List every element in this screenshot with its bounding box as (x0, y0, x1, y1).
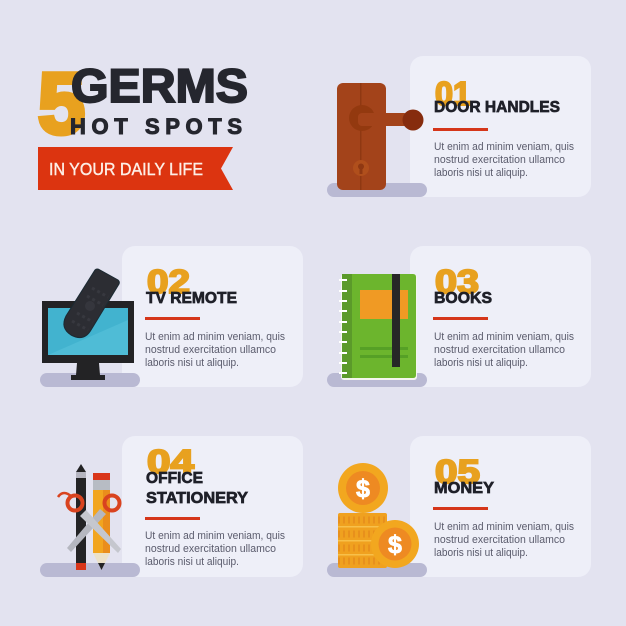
panel: office stationery (40, 436, 303, 577)
icon: coins (327, 463, 427, 577)
body text (145, 530, 285, 568)
body text: nostrud exercitation ullamco (434, 154, 565, 166)
heading: office stationery: STATIONERY (146, 490, 248, 507)
body text: Ut enim ad minim veniam, quis (145, 331, 285, 343)
body text (145, 331, 285, 369)
body text (434, 521, 574, 559)
body text: laboris nisi ut aliquip. (145, 357, 239, 369)
big number 5: 5 (38, 56, 85, 152)
accent line (145, 317, 200, 320)
body text: laboris nisi ut aliquip. (434, 547, 528, 559)
number 05: 05 (435, 453, 480, 490)
icon: door handle (327, 83, 427, 197)
heading: office stationery: OFFICE (146, 470, 203, 487)
icon: coins: $ (388, 531, 402, 559)
icon: book (327, 274, 427, 387)
number 04: 04 (147, 443, 195, 480)
icon: coins: $ (356, 475, 370, 503)
number 03: 03 (435, 263, 479, 300)
panel: door handles (327, 56, 591, 197)
heading: books: BOOKS (434, 290, 492, 307)
heading: door handles: DOOR HANDLES (434, 99, 560, 116)
body text: nostrud exercitation ullamco (434, 534, 565, 546)
body text: laboris nisi ut aliquip. (434, 167, 528, 179)
body text: nostrud exercitation ullamco (145, 543, 276, 555)
body text (434, 331, 574, 369)
heading: GERMS: GERMS (71, 59, 248, 112)
accent line (433, 317, 488, 320)
heading: office stationery (146, 470, 248, 507)
body text: laboris nisi ut aliquip. (145, 556, 239, 568)
title block (38, 56, 248, 190)
number 02: 02 (147, 263, 190, 300)
ribbon banner (38, 147, 233, 190)
accent line (433, 507, 488, 510)
heading: HOT SPOTS: HOT SPOTS (70, 114, 242, 139)
accent line (433, 128, 488, 131)
body text: nostrud exercitation ullamco (434, 344, 565, 356)
body text: Ut enim ad minim veniam, quis (145, 530, 285, 542)
ribbon banner: IN YOUR DAILY LIFE (49, 159, 203, 179)
body text: laboris nisi ut aliquip. (434, 357, 528, 369)
number 01: 01 (435, 75, 471, 112)
body text: Ut enim ad minim veniam, quis (434, 521, 574, 533)
icon: pen pencil scissors (40, 464, 140, 577)
panel: money (327, 436, 591, 577)
heading: tv remote: TV REMOTE (146, 290, 237, 307)
body text: Ut enim ad minim veniam, quis (434, 331, 574, 343)
body text (434, 141, 574, 179)
panel: tv remote (40, 246, 303, 387)
body text: Ut enim ad minim veniam, quis (434, 141, 574, 153)
icon: tv and remote (40, 269, 140, 387)
body text: nostrud exercitation ullamco (145, 344, 276, 356)
heading: money: MONEY (434, 480, 494, 497)
panel: books (327, 246, 591, 387)
accent line (145, 517, 200, 520)
